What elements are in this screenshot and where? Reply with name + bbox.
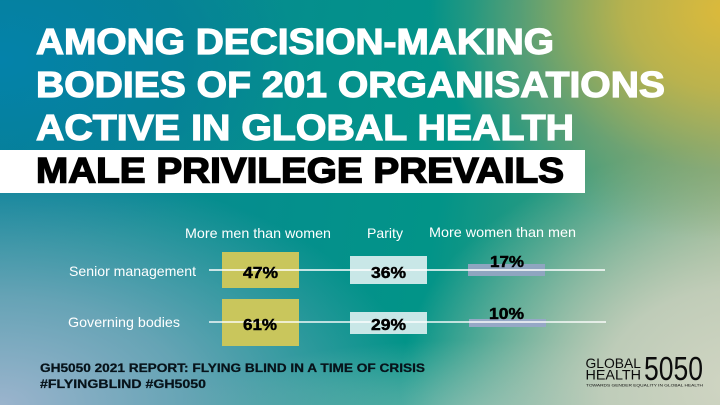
chart row: governing bodies: 10% — [489, 306, 524, 323]
column headings: More men than women — [185, 225, 331, 241]
chart row: senior management: 36% — [371, 265, 406, 282]
chart row: senior management: 47% — [243, 265, 278, 282]
column headings — [185, 224, 576, 241]
title: AMONG DECISION-MAKING — [36, 21, 554, 62]
headline band: MALE PRIVILEGE PREVAILS — [36, 152, 564, 190]
chart row: governing bodies — [68, 299, 606, 346]
logo: Global Health 5050: HEALTH — [586, 366, 641, 382]
title: ACTIVE IN GLOBAL HEALTH — [36, 107, 574, 148]
title: BODIES OF 201 ORGANISATIONS — [36, 64, 665, 105]
chart row: senior management: Senior management — [69, 263, 196, 279]
footer source text: #FLYINGBLIND #GH5050 — [40, 377, 206, 391]
chart row: senior management: 17% — [490, 254, 524, 271]
logo: Global Health 5050: 5050 — [644, 350, 703, 387]
logo: Global Health 5050: TOWARDS GENDER EQUALITY IN GLOBAL HEALTH — [586, 382, 703, 388]
logo: Global Health 5050 — [586, 350, 703, 388]
chart row: governing bodies: 61% — [243, 317, 277, 334]
chart row: governing bodies: Governing bodies — [68, 314, 180, 330]
footer source text: GH5050 2021 REPORT: FLYING BLIND IN A TIME OF CRISIS — [40, 361, 425, 375]
logo: Global Health 5050: GLOBAL — [586, 355, 641, 371]
chart row: senior management — [69, 252, 605, 288]
column headings: More women than men — [429, 224, 576, 240]
footer source text — [40, 361, 425, 391]
title — [36, 21, 665, 148]
chart row: governing bodies: 29% — [371, 317, 406, 334]
column headings: Parity — [367, 225, 403, 241]
